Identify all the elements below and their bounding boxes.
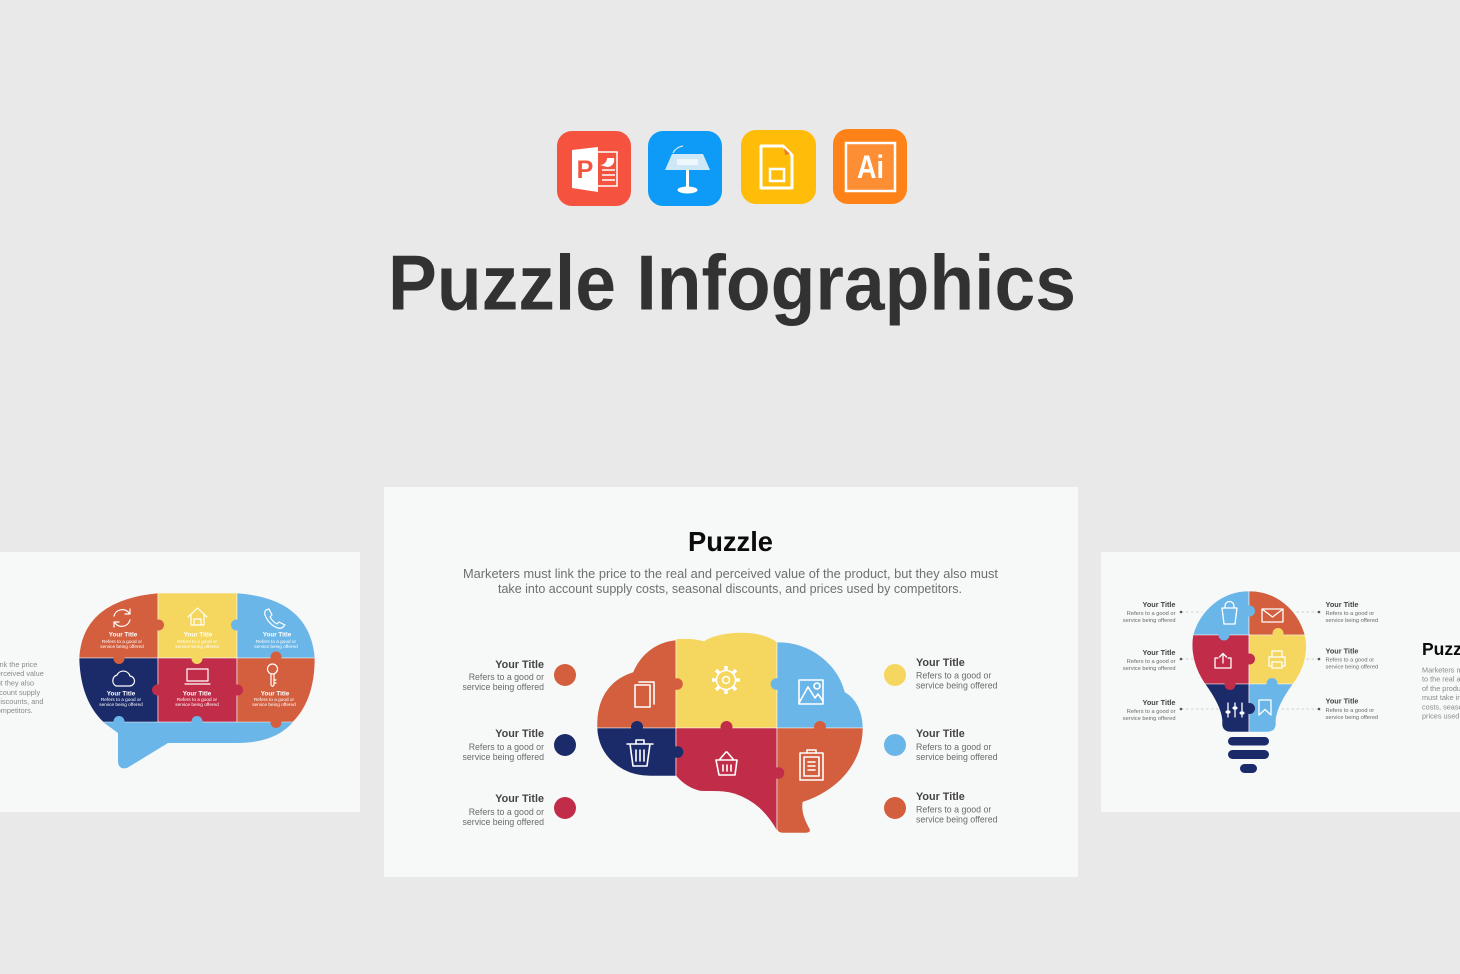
- legend item: orange: [884, 791, 998, 824]
- legend item: blue: Your Title: [916, 728, 965, 740]
- legend item: orange: Refers to a good or: [916, 804, 991, 814]
- legend item: red: service being offered: [462, 817, 544, 827]
- text block: intro: [463, 567, 999, 596]
- labels: bubble cells: service being offered: [175, 644, 219, 649]
- panel: speech bubble slide (left): [0, 552, 360, 812]
- labels: bulb right: Refers to a good or: [1326, 708, 1374, 714]
- legend item: navy: Refers to a good or: [469, 742, 544, 752]
- icon: upload: [1215, 654, 1231, 668]
- labels: bubble cells: Your Title: [183, 690, 212, 698]
- legend item: orange: Your Title: [916, 791, 965, 803]
- labels: bubble cells: Refers to a good or: [254, 697, 294, 702]
- icon: Google Slides: [741, 130, 816, 204]
- legend item: orange: service being offered: [462, 682, 544, 692]
- labels: bulb left: service being offered: [1123, 618, 1176, 624]
- legend: left column: [462, 659, 576, 827]
- legend item: yellow: Refers to a good or: [916, 670, 991, 680]
- icon: mail: [1262, 609, 1283, 622]
- labels: bulb left: Your Title: [1143, 648, 1176, 657]
- main title: Puzzle Infographics: [388, 238, 1076, 326]
- labels: bulb right: service being offered: [1326, 664, 1378, 670]
- icon: clipboard: [800, 750, 823, 780]
- leader dots: [1180, 611, 1320, 710]
- labels: bubble cells: service being offered: [175, 702, 219, 707]
- icon: trash: [627, 740, 653, 766]
- text block: clipped paragraph: [1422, 666, 1460, 720]
- labels: bulb right: Your Title: [1326, 600, 1358, 609]
- icon: bookmark: [1259, 700, 1271, 715]
- labels: bulb left: Refers to a good or: [1127, 709, 1176, 715]
- labels: bubble cells: service being offered: [100, 644, 144, 649]
- labels: bulb right: Refers to a good or: [1326, 658, 1374, 664]
- labels: bubble cells: Refers to a good or: [177, 697, 217, 702]
- icon: refresh: [114, 609, 130, 627]
- labels: bubble cells: Refers to a good or: [101, 697, 141, 702]
- legend item: navy: service being offered: [462, 752, 544, 762]
- icon: documents: [635, 682, 654, 707]
- chart: brain puzzle: [597, 632, 863, 833]
- icon: laptop: [185, 669, 210, 684]
- icon: Illustrator: Ai: [857, 149, 884, 185]
- labels: bulb left: service being offered: [1123, 666, 1176, 672]
- labels: bulb right: Your Title: [1326, 646, 1358, 656]
- legend: right column: [884, 657, 998, 824]
- icon: key: [268, 664, 278, 686]
- icon: phone: [265, 609, 285, 628]
- legend item: orange: service being offered: [916, 814, 998, 824]
- chart: speech bubble puzzle: [79, 593, 315, 768]
- labels: bulb right: service being offered: [1326, 715, 1378, 721]
- labels: bubble cells: Refers to a good or: [102, 639, 142, 644]
- icon: house: [188, 608, 207, 625]
- heading: Puzzle: Puzzle: [688, 526, 773, 557]
- icon: cloud: [113, 671, 135, 686]
- legend item: orange: Your Title: [495, 659, 544, 671]
- legend item: navy: [462, 728, 576, 762]
- panel: brain slide (center): [384, 487, 1078, 877]
- labels: bulb left: Refers to a good or: [1127, 611, 1176, 617]
- labels: bulb right: Your Title: [1326, 696, 1358, 706]
- icon: image: [799, 680, 823, 704]
- legend item: yellow: Your Title: [916, 657, 965, 669]
- icon: PowerPoint: [557, 131, 631, 206]
- legend item: orange: [462, 659, 576, 692]
- bulb base: [1228, 737, 1269, 773]
- labels: bubble cells: [99, 632, 298, 707]
- legend item: red: [462, 793, 576, 827]
- icon: PowerPoint: P: [577, 156, 593, 184]
- legend item: red: Refers to a good or: [469, 807, 544, 817]
- legend item: navy: Your Title: [495, 728, 544, 740]
- icon: Illustrator: [833, 129, 907, 204]
- labels: bubble cells: Your Title: [107, 690, 136, 698]
- labels: bulb right: [1326, 600, 1378, 721]
- icon: Keynote: [648, 131, 722, 206]
- leader lines: [1181, 612, 1319, 709]
- labels: bulb left: service being offered: [1123, 716, 1176, 722]
- legend item: red: Your Title: [495, 793, 544, 805]
- labels: bubble cells: Your Title: [263, 632, 292, 638]
- labels: bubble cells: Refers to a good or: [177, 639, 217, 644]
- text block: intro: Marketers must link the price to the real and perceived value of the product, but they also must: [463, 567, 999, 581]
- text block: intro: take into account supply costs, seasonal discounts, and prices used by competitors.: [498, 582, 962, 596]
- labels: bubble cells: Your Title: [109, 632, 138, 638]
- labels: bubble cells: service being offered: [252, 702, 296, 707]
- icon: bag: [1222, 602, 1237, 624]
- labels: bubble cells: Refers to a good or: [256, 639, 296, 644]
- labels: bulb left: Refers to a good or: [1127, 659, 1176, 665]
- legend item: blue: Refers to a good or: [916, 742, 991, 752]
- labels: bubble cells: Your Title: [261, 690, 290, 698]
- legend item: orange: Refers to a good or: [469, 672, 544, 682]
- labels: bubble cells: service being offered: [99, 702, 143, 707]
- chart: light bulb puzzle: [1192, 591, 1306, 773]
- legend item: yellow: service being offered: [916, 680, 998, 690]
- icon: sliders: [1227, 703, 1243, 717]
- app icons row: [557, 129, 907, 206]
- labels: bulb left: Your Title: [1143, 698, 1176, 707]
- legend item: yellow: [884, 657, 998, 690]
- labels: bubble cells: service being offered: [254, 644, 298, 649]
- labels: bulb right: service being offered: [1326, 618, 1378, 624]
- text block: clipped paragraph: [0, 660, 44, 715]
- icon: printer: [1269, 651, 1285, 668]
- icon: gear: [712, 666, 740, 694]
- labels: bulb right: Refers to a good or: [1326, 611, 1374, 617]
- icon: basket: [716, 752, 737, 775]
- labels: bulb left: Your Title: [1143, 600, 1176, 609]
- legend item: blue: [884, 728, 998, 762]
- panel: light bulb slide (right): [1101, 552, 1460, 812]
- labels: bulb left: [1123, 600, 1176, 722]
- legend item: blue: service being offered: [916, 752, 998, 762]
- labels: bubble cells: Your Title: [184, 632, 213, 638]
